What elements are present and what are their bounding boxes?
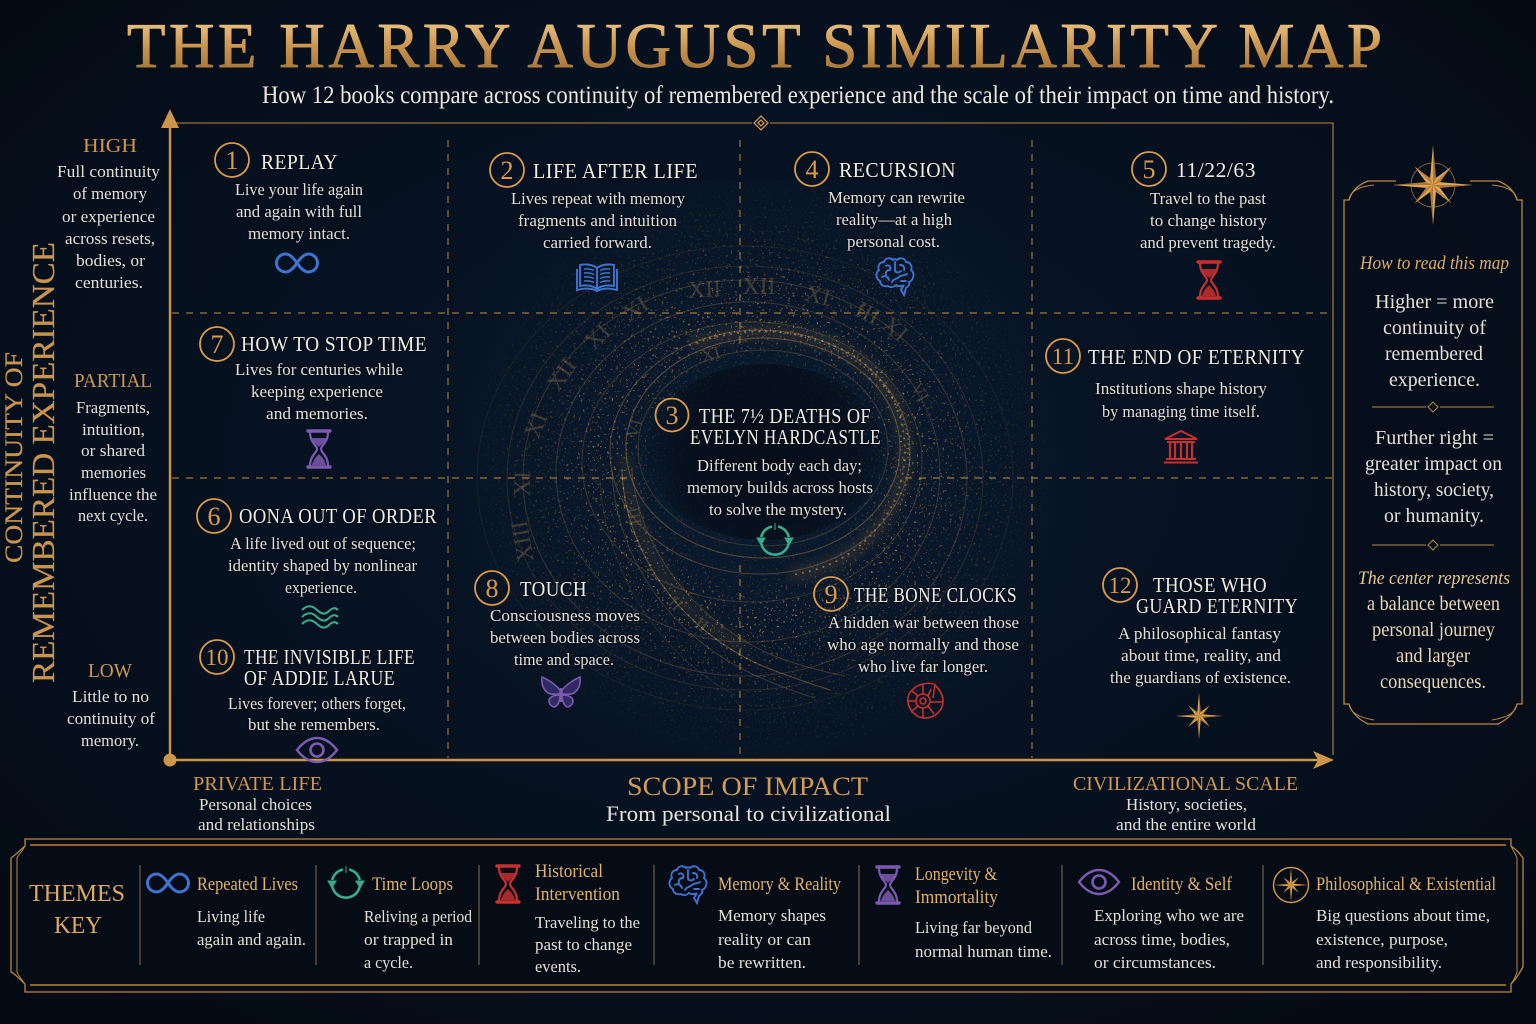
horizontal reading rule: or humanity. (1384, 505, 1484, 527)
book 4: Recursion: RECURSION (839, 158, 956, 182)
key: memory and reality: Memory & Reality (718, 874, 841, 895)
central spiral clock artwork: XI (876, 312, 913, 348)
subtitle: How 12 books compare across continuity of remembered experience and the scale of their impact on time and history. (262, 82, 1334, 109)
y axis level: partial: next cycle. (78, 506, 148, 525)
book 6: Oona Out of Order: experience. (285, 578, 357, 597)
book 7: How to Stop Time: keeping experience (251, 382, 383, 401)
book 5: 11/22/63: Travel to the past (1150, 189, 1266, 208)
book 4: Recursion: 4 (806, 155, 818, 184)
central spiral clock artwork: XIII (507, 519, 539, 564)
key: repeated lives: again and again. (197, 930, 306, 949)
book 11: The End of Eternity: 11 (1052, 344, 1074, 369)
x axis label: private life (193, 773, 322, 834)
key heading (29, 881, 125, 939)
title: THE HARRY AUGUST SIMILARITY MAP (127, 11, 1382, 81)
y axis level: high: HIGH (83, 135, 137, 157)
book 8: Touch: 8 (486, 574, 498, 603)
x axis label: private life: and relationships (198, 815, 315, 834)
horizontal reading rule: greater impact on (1365, 453, 1502, 475)
book 12: Those Who Guard Eternity: THOSE WHO (1153, 573, 1267, 597)
x axis label: civilizational scale: and the entire world (1116, 815, 1256, 834)
x axis label: private life: Personal choices (199, 795, 312, 814)
book 2: Life After Life: Lives repeat with memory (511, 189, 685, 208)
book 9: The Bone Clocks: who live far longer. (858, 657, 988, 676)
y axis level: low: memory. (81, 731, 139, 750)
central spiral clock artwork: XI (618, 291, 654, 327)
center meaning note: a balance between (1367, 593, 1500, 615)
book 5: 11/22/63 (1132, 152, 1276, 298)
book 9: The Bone Clocks: 9 (824, 580, 838, 609)
key: historical intervention (497, 861, 640, 976)
book 10: The Invisible Life of Addie LaRue: OF ADDIE LARUE (244, 666, 395, 690)
book 2: Life After Life: LIFE AFTER LIFE (533, 159, 698, 183)
book 8: Touch (475, 571, 640, 707)
book 10: The Invisible Life of Addie LaRue: but she remembers. (248, 715, 380, 734)
y axis arrow (161, 109, 179, 760)
book 1: Replay (215, 143, 363, 272)
central spiral clock artwork: III (623, 505, 646, 527)
book 7: How to Stop Time: Lives for centuries while (235, 360, 403, 379)
y axis level: partial: memories (81, 463, 146, 482)
center meaning note: and larger (1396, 645, 1470, 667)
center meaning note: The center represents (1358, 568, 1510, 589)
central spiral clock artwork: XI (510, 471, 536, 497)
key: time loops (328, 866, 472, 972)
vertical reading rule (1375, 291, 1494, 391)
y axis level: partial: PARTIAL (74, 370, 152, 392)
key: longevity and immortality: normal human time. (915, 942, 1052, 961)
book 5: 11/22/63: 5 (1142, 155, 1156, 184)
x axis arrow (164, 751, 1334, 769)
key: identity and self: or circumstances. (1094, 953, 1216, 972)
y axis level: high: across resets, (65, 229, 155, 248)
y axis level: high: bodies, or (76, 251, 145, 270)
icon: compass star (1393, 145, 1473, 225)
key: philosophical and existential: Big questions about time, (1316, 906, 1490, 925)
key: time loops: Reliving a period (364, 907, 472, 926)
key: historical intervention: Historical (535, 861, 603, 882)
book 2: Life After Life: fragments and intuition (518, 211, 677, 230)
x axis title: SCOPE OF IMPACT (627, 772, 868, 801)
panel: themes key (11, 839, 1523, 992)
book 5: 11/22/63: to change history (1150, 211, 1267, 230)
book 9: The Bone Clocks: who age normally and those (827, 635, 1019, 654)
book 2: Life After Life (490, 153, 698, 291)
key: philosophical and existential: Philosophical & Existential (1316, 874, 1496, 895)
key: memory and reality: Memory shapes (718, 906, 826, 925)
key: longevity and immortality: Longevity & (915, 864, 997, 885)
central spiral clock artwork: II (691, 613, 712, 637)
key heading: THEMES (29, 881, 125, 907)
book 4: Recursion: Memory can rewrite (828, 188, 965, 207)
book 2: Life After Life: 2 (500, 156, 514, 185)
central spiral clock artwork: XI (699, 342, 722, 366)
book 3: The 7½ Deaths of Evelyn Hardcastle: to solve the mystery. (709, 500, 847, 519)
key: historical intervention: past to change (535, 935, 632, 954)
book 2: Life After Life: carried forward. (543, 233, 652, 252)
grid dividers (172, 140, 1333, 758)
book 6: Oona Out of Order: identity shaped by nonlinear (228, 556, 417, 575)
vertical reading rule: continuity of (1383, 317, 1486, 339)
y axis level: partial: or shared (81, 441, 146, 460)
central spiral clock artwork: III (851, 297, 884, 331)
book 4: Recursion: reality—at a high (836, 210, 952, 229)
key: philosophical and existential: and responsibility. (1316, 953, 1442, 972)
key: repeated lives (148, 874, 306, 949)
key: longevity and immortality (877, 864, 1052, 961)
center meaning note: personal journey (1372, 619, 1495, 641)
y axis level: high: or experience (62, 207, 155, 226)
book 4: Recursion: personal cost. (847, 232, 940, 251)
key heading: KEY (54, 913, 102, 939)
book 10: The Invisible Life of Addie LaRue (200, 640, 415, 762)
y axis level: partial (69, 370, 157, 525)
book 1: Replay: Live your life again (235, 180, 363, 199)
key: identity and self: across time, bodies, (1094, 930, 1230, 949)
key: historical intervention: Intervention (535, 884, 620, 905)
book 10: The Invisible Life of Addie LaRue: Lives forever; others forget, (228, 694, 406, 713)
x axis label: civilizational scale: CIVILIZATIONAL SCALE (1073, 773, 1298, 795)
book 8: Touch: between bodies across (490, 628, 640, 647)
key: memory and reality (669, 866, 841, 972)
central spiral clock artwork (380, 180, 1180, 760)
center meaning note (1358, 568, 1510, 693)
book 1: Replay: memory intact. (248, 224, 350, 243)
map frame: top and right border (170, 116, 1333, 755)
horizontal reading rule (1365, 427, 1502, 527)
book 5: 11/22/63: and prevent tragedy. (1140, 233, 1276, 252)
key: time loops: or trapped in (364, 930, 454, 949)
central spiral clock artwork: XI (802, 281, 833, 312)
y axis level: high (57, 135, 161, 292)
x axis label: civilizational scale (1073, 773, 1298, 834)
y axis level: low: continuity of (67, 709, 155, 728)
book 12: Those Who Guard Eternity (1103, 568, 1298, 739)
key: philosophical and existential (1274, 868, 1496, 972)
y axis level: low: Little to no (72, 687, 149, 706)
book 11: The End of Eternity: Institutions shape history (1095, 379, 1267, 398)
central spiral clock artwork: XII (742, 274, 776, 300)
key: time loops: Time Loops (372, 874, 453, 895)
book 3: The 7½ Deaths of Evelyn Hardcastle: THE 7½ DEATHS OF (699, 404, 871, 428)
key: philosophical and existential: existence, purpose, (1316, 930, 1448, 949)
book 11: The End of Eternity: THE END OF ETERNITY (1088, 345, 1305, 369)
book 6: Oona Out of Order (197, 499, 437, 628)
book 3: The 7½ Deaths of Evelyn Hardcastle: 3 (666, 401, 678, 430)
key: repeated lives: Living life (197, 907, 265, 926)
book 12: Those Who Guard Eternity: 12 (1108, 573, 1132, 598)
book 6: Oona Out of Order: OONA OUT OF ORDER (239, 504, 437, 528)
book 7: How to Stop Time (200, 327, 427, 467)
central spiral clock artwork: XI (520, 409, 553, 442)
book 6: Oona Out of Order: 6 (208, 502, 220, 531)
book 9: The Bone Clocks: THE BONE CLOCKS (854, 583, 1017, 607)
key: memory and reality: reality or can (718, 930, 812, 949)
key: time loops: a cycle. (364, 953, 413, 972)
x axis label: civilizational scale: History, societies, (1126, 795, 1247, 814)
book 9: The Bone Clocks: A hidden war between those (828, 613, 1019, 632)
vertical reading rule: experience. (1389, 369, 1480, 391)
central spiral clock artwork: VI (907, 379, 934, 405)
y axis level: high: of memory (73, 184, 147, 203)
y axis level: high: Full continuity (57, 162, 161, 181)
book 8: Touch: time and space. (514, 650, 614, 669)
book 12: Those Who Guard Eternity: A philosophical fantasy (1118, 624, 1282, 643)
vertical reading rule: remembered (1385, 343, 1483, 365)
book 5: 11/22/63: 11/22/63 (1176, 158, 1256, 182)
central spiral clock artwork: XII (542, 354, 582, 396)
book 1: Replay: REPLAY (261, 150, 338, 174)
book 7: How to Stop Time: HOW TO STOP TIME (241, 332, 427, 356)
key: identity and self (1079, 870, 1244, 972)
book 3: The 7½ Deaths of Evelyn Hardcastle: Different body each day; (697, 456, 862, 475)
y axis title: REMEMBERED EXPERIENCE (25, 242, 61, 683)
central spiral clock artwork: VI (622, 417, 646, 440)
key: historical intervention: Traveling to the (535, 913, 640, 932)
panel: how to read this map (1344, 145, 1522, 724)
book 12: Those Who Guard Eternity: GUARD ETERNITY (1136, 594, 1298, 618)
x axis title: From personal to civilizational (606, 801, 891, 826)
book 7: How to Stop Time: and memories. (266, 404, 368, 423)
book 9: The Bone Clocks (814, 577, 1019, 718)
book 3: The 7½ Deaths of Evelyn Hardcastle: memory builds across hosts (687, 478, 873, 497)
key: repeated lives: Repeated Lives (197, 874, 298, 895)
y axis level: low: LOW (88, 660, 132, 682)
book 8: Touch: TOUCH (520, 577, 587, 601)
x axis label: private life: PRIVATE LIFE (193, 773, 322, 795)
book 11: The End of Eternity: by managing time itself. (1102, 402, 1260, 421)
central spiral clock artwork: II (664, 593, 687, 615)
horizontal reading rule: history, society, (1374, 479, 1494, 501)
y axis title (1, 242, 61, 683)
vertical reading rule: Higher = more (1375, 291, 1494, 313)
y axis level: partial: influence the (69, 485, 157, 504)
horizontal reading rule: Further right = (1375, 427, 1494, 449)
x axis title (606, 772, 891, 826)
book 8: Touch: Consciousness moves (490, 606, 640, 625)
key: identity and self: Exploring who we are (1094, 906, 1244, 925)
book 7: How to Stop Time: 7 (210, 330, 224, 359)
panel heading: How to read this map (1359, 253, 1509, 274)
book 10: The Invisible Life of Addie LaRue: THE INVISIBLE LIFE (244, 645, 415, 669)
book 3: The 7½ Deaths of Evelyn Hardcastle (656, 398, 881, 555)
center meaning note: consequences. (1380, 671, 1486, 693)
key: longevity and immortality: Immortality (915, 887, 998, 908)
book 1: Replay: 1 (226, 146, 238, 175)
key: historical intervention: events. (535, 957, 581, 976)
central spiral clock artwork: XI (580, 319, 616, 355)
y axis title: CONTINUITY OF (1, 352, 28, 563)
book 12: Those Who Guard Eternity: the guardians of existence. (1110, 668, 1291, 687)
y axis level: high: centuries. (75, 273, 143, 292)
key: longevity and immortality: Living far beyond (915, 918, 1032, 937)
book 4: Recursion (795, 152, 965, 295)
book 3: The 7½ Deaths of Evelyn Hardcastle: EVELYN HARDCASTLE (690, 425, 881, 449)
y axis level: partial: intuition, (82, 420, 145, 439)
y axis level: partial: Fragments, (76, 398, 150, 417)
book 12: Those Who Guard Eternity: about time, reality, and (1121, 646, 1281, 665)
central spiral clock artwork: XII (687, 276, 722, 304)
book 6: Oona Out of Order: A life lived out of sequence; (230, 534, 416, 553)
book 10: The Invisible Life of Addie LaRue: 10 (206, 645, 228, 670)
y axis level: low (67, 660, 155, 750)
key: identity and self: Identity & Self (1131, 874, 1233, 895)
key: memory and reality: be rewritten. (718, 953, 806, 972)
book 11: The End of Eternity (1046, 339, 1305, 462)
book 1: Replay: and again with full (236, 202, 362, 221)
